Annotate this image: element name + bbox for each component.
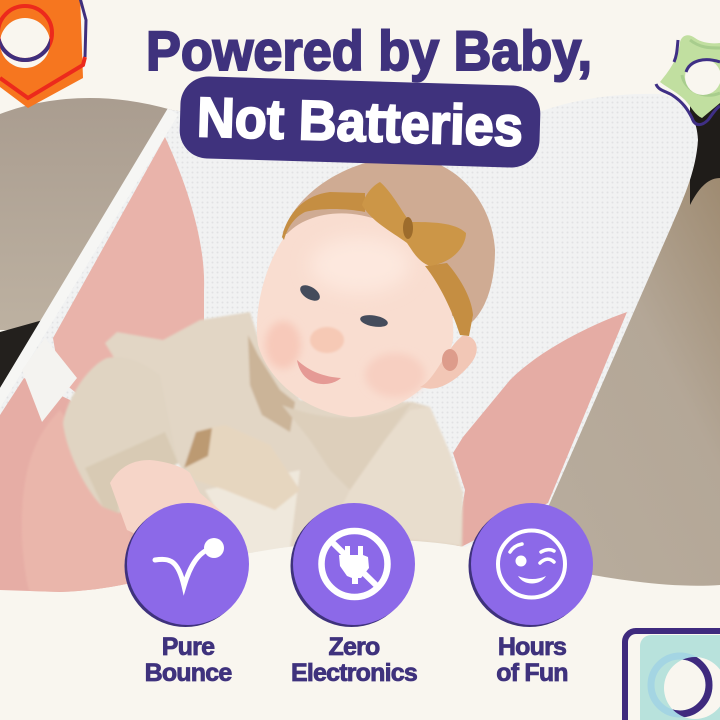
baby — [63, 157, 495, 560]
circle shadow — [468, 505, 590, 627]
circle shadow — [124, 505, 246, 627]
orange teether decoration — [0, 0, 86, 108]
seat label tag — [22, 338, 77, 422]
tassel fringe — [218, 472, 298, 510]
teal teether decoration — [625, 631, 720, 720]
headband — [282, 192, 473, 336]
icon: winking face — [498, 530, 565, 598]
sweater cuff — [85, 432, 178, 513]
title line one: Powered by Baby, — [146, 19, 592, 82]
label: of Fun — [496, 659, 568, 687]
pink bib — [24, 414, 130, 592]
circle — [293, 503, 415, 625]
title pill: Not Batteries — [179, 76, 541, 168]
headband bow — [362, 182, 466, 266]
left pink panel — [53, 137, 204, 420]
sweater upper body — [105, 312, 463, 560]
label: Bounce — [145, 659, 232, 687]
face — [257, 213, 453, 417]
label: Zero — [329, 633, 380, 661]
cheek blush — [265, 321, 301, 369]
feature: zero electronics — [290, 503, 417, 687]
dark floor corner — [0, 320, 40, 388]
bouncer seat mesh — [0, 93, 698, 560]
sweater sleeve — [63, 357, 178, 513]
carpet background — [548, 178, 720, 586]
icon: bounce arrow — [155, 538, 224, 586]
photo: baby in bouncer — [0, 90, 720, 600]
label: Electronics — [291, 659, 417, 687]
seat edge strip — [0, 108, 178, 408]
collar shadow — [248, 335, 295, 432]
sweater lower lighter front — [205, 470, 300, 560]
label: Pure — [162, 633, 215, 661]
left eye — [300, 285, 320, 301]
forehead highlight — [315, 240, 405, 290]
hand — [110, 460, 222, 534]
icon: crossed plug — [322, 531, 388, 597]
right pink panel — [453, 312, 627, 550]
pill background — [179, 76, 541, 168]
circle — [127, 503, 249, 625]
right eye — [360, 315, 388, 327]
pill text: Not Batteries — [196, 85, 524, 158]
feature: hours of fun — [468, 503, 593, 687]
nose — [310, 327, 344, 353]
feature: pure bounce — [124, 503, 249, 687]
dark top right corner — [690, 95, 720, 205]
lower left pink fabric — [0, 378, 134, 592]
ear — [420, 336, 477, 389]
sofa background — [0, 98, 180, 330]
green teether decoration — [656, 35, 720, 125]
hair — [283, 157, 495, 322]
circle — [471, 503, 593, 625]
label: Hours — [498, 633, 566, 661]
circle shadow — [290, 505, 412, 627]
sweater — [63, 312, 463, 560]
mouth — [297, 360, 341, 384]
